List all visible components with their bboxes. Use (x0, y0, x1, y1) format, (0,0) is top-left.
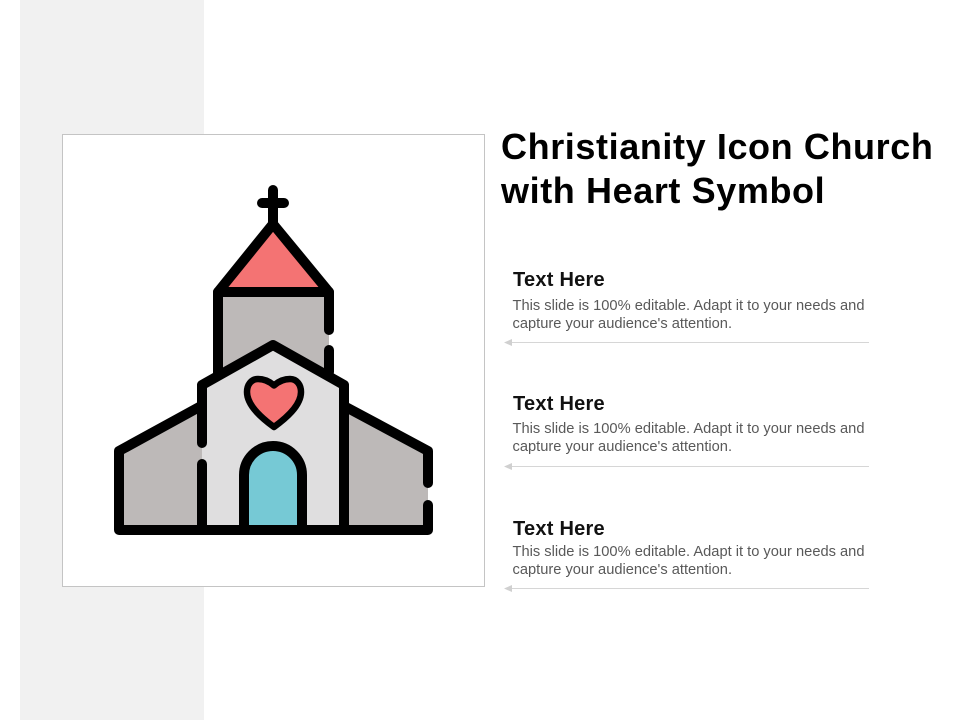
text block: item 1 (512, 298, 864, 332)
text block: item 1: capture your audience's attention. (512, 316, 732, 332)
heading: item 3: Text Here (513, 518, 605, 540)
text block: item 2: This slide is 100% editable. Adapt it to your needs and (512, 421, 864, 437)
arrow: item 1 (504, 339, 869, 346)
text block: item 1: This slide is 100% editable. Adapt it to your needs and (512, 298, 864, 314)
heading: item 2: Text Here (513, 393, 605, 415)
title: with Heart Symbol (501, 170, 825, 211)
text block: item 2 (512, 421, 864, 455)
heading: item 1: Text Here (513, 269, 605, 291)
arrow: item 3 (504, 585, 869, 592)
text block: item 3: This slide is 100% editable. Adapt it to your needs and (512, 544, 864, 560)
title (500, 126, 933, 211)
panel: icon frame (62, 134, 485, 587)
arrow: item 2 (504, 463, 869, 470)
text block: item 3 (512, 544, 864, 578)
text block: item 2: capture your audience's attention. (512, 439, 732, 455)
background band (20, 0, 204, 720)
text block: item 3: capture your audience's attention. (512, 562, 732, 578)
title: Christianity Icon Church (501, 126, 933, 167)
